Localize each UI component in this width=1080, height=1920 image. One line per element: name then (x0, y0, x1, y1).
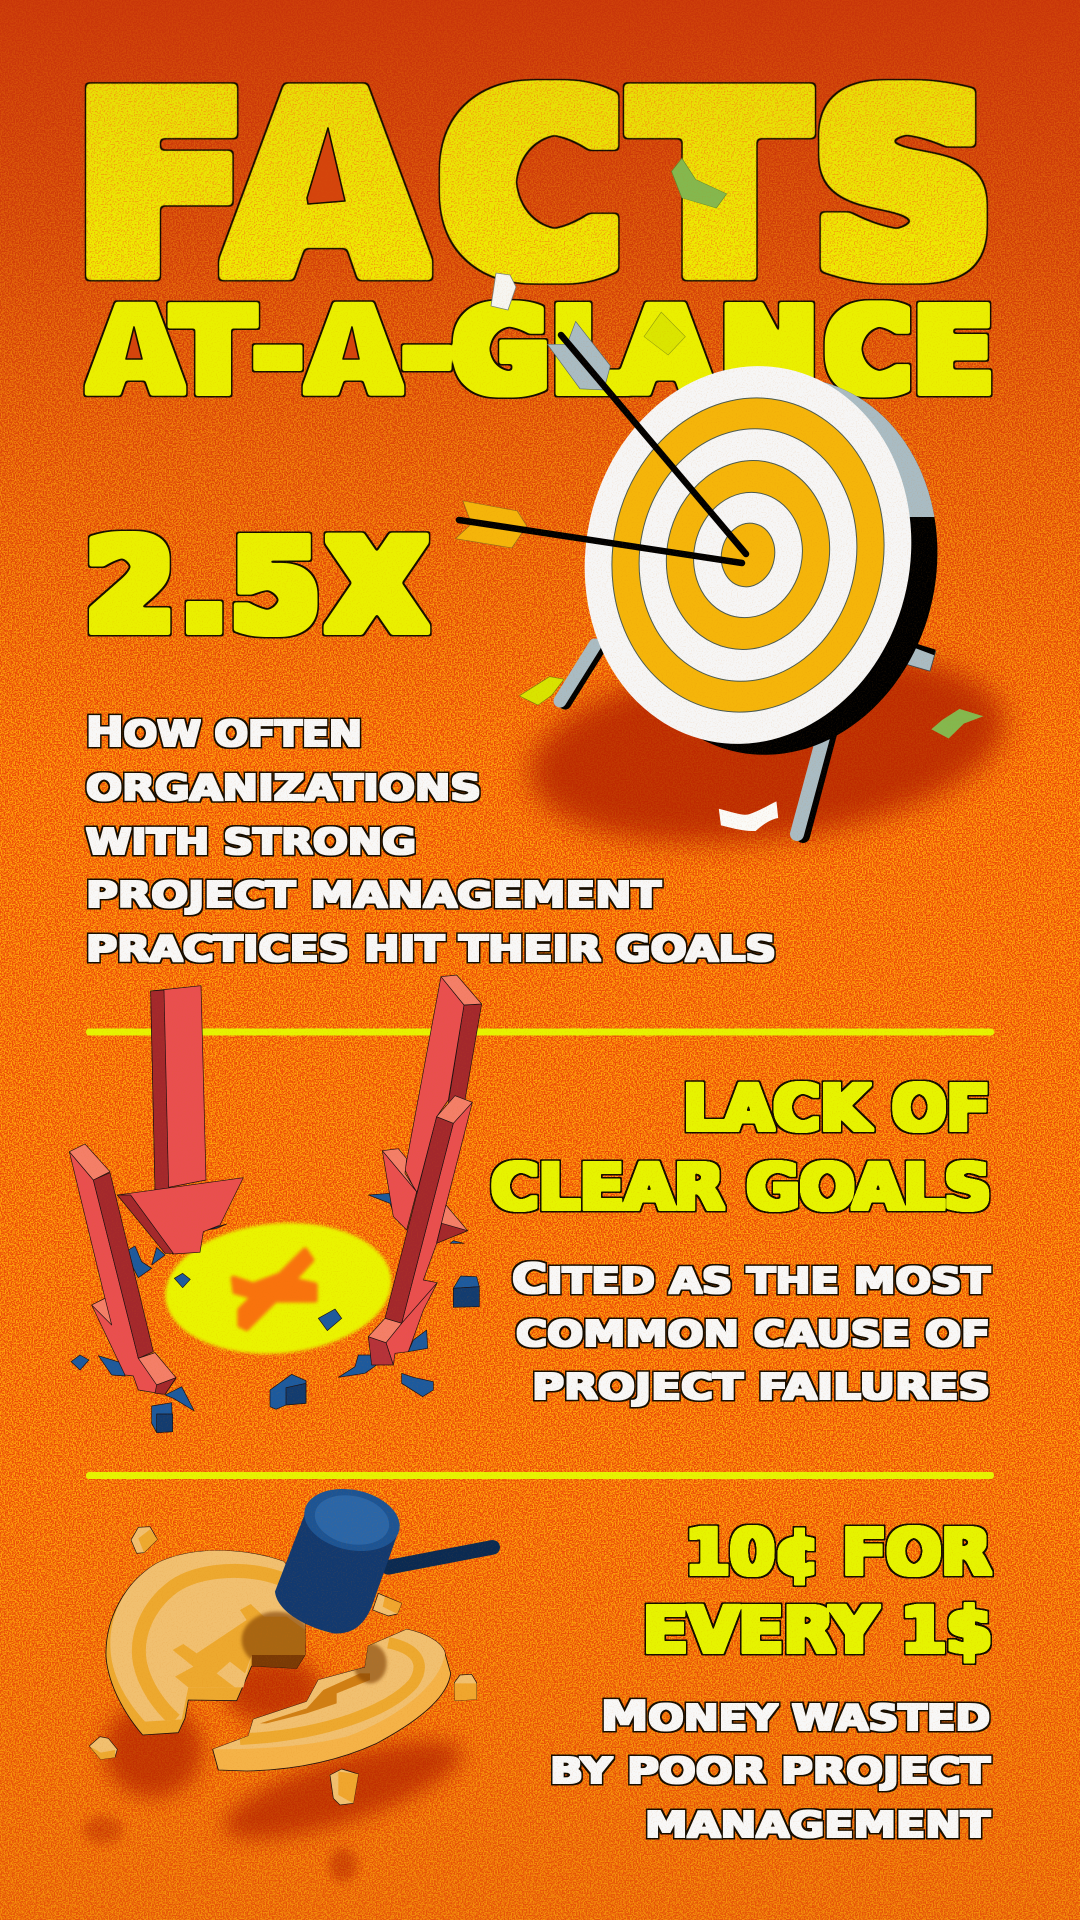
confetti around target (519, 677, 983, 831)
heading: 10 cents for every dollar: 10¢ FOR (685, 1516, 991, 1589)
target rim upper (822, 382, 934, 517)
text block: how often: PRACTICES HIT THEIR GOALS (86, 929, 776, 970)
text block: cited: COMMON CAUSE OF (516, 1314, 990, 1355)
target left leg (560, 645, 600, 703)
heading: lack of clear goals: LACK OF (683, 1072, 990, 1145)
yellow spot (160, 1214, 397, 1363)
icon: hammer smashing coin (89, 1481, 493, 1805)
hammer handle (388, 1547, 493, 1567)
title: FACTS: FACTS (78, 46, 990, 328)
right coin piece (213, 1629, 451, 1771)
text block: how often: HOW OFTEN (86, 708, 362, 756)
hammer (275, 1481, 493, 1633)
target shadow (518, 627, 1016, 869)
target front leg (797, 730, 831, 836)
blue cracks and debris (71, 1193, 479, 1433)
left arrow (69, 1144, 176, 1394)
hammer body (275, 1513, 399, 1633)
text block: how often: PROJECT MANAGEMENT (86, 875, 662, 916)
hammer top inset (310, 1489, 394, 1551)
text block: cited (512, 1255, 991, 1408)
icon: archery target (554, 366, 938, 843)
left coin ring (139, 1571, 312, 1720)
big arrow down (117, 986, 243, 1254)
letter counters (126, 128, 359, 359)
arrow: left orange (456, 501, 742, 563)
title: AT-A-GLANCE: AT-A-GLANCE (91, 285, 993, 419)
text block: how often (86, 708, 776, 970)
text block: cited: CITED AS THE MOST (512, 1255, 991, 1303)
right coin ring (240, 1643, 419, 1739)
heading: lack of clear goals: CLEAR GOALS (491, 1151, 991, 1224)
heading: 10 cents for every dollar: EVERY 1$ (643, 1594, 992, 1667)
divider 2 (86, 1472, 994, 1479)
text block: cited: PROJECT FAILURES (532, 1367, 990, 1408)
hammer top (298, 1481, 406, 1559)
icon: arrows crashing around target (69, 975, 482, 1433)
text block: how often: WITH STRONG (86, 822, 416, 863)
text block: how often: ORGANIZATIONS (86, 768, 481, 809)
coin shadows (83, 1656, 472, 1882)
text block: money wasted (550, 1692, 991, 1846)
arrow: top grey (547, 321, 746, 554)
heading: lack of clear goals (491, 1072, 991, 1224)
text block: money wasted: MONEY WASTED (601, 1692, 990, 1740)
front right arrow (368, 1096, 472, 1365)
divider 1 (86, 1028, 994, 1036)
target rear leg (903, 642, 936, 671)
heading: 10 cents for every dollar (643, 1516, 992, 1667)
confetti over title (491, 158, 727, 355)
rear right arrow (382, 975, 482, 1230)
text block: money wasted: BY POOR PROJECT (550, 1751, 991, 1792)
blurred X (233, 1250, 315, 1328)
target rim (580, 347, 972, 785)
coin debris (89, 1527, 477, 1805)
stat: 2.5X: 2.5X (86, 512, 426, 660)
left coin piece (106, 1551, 305, 1735)
text block: money wasted: MANAGEMENT (645, 1805, 991, 1846)
target rings (550, 335, 946, 775)
